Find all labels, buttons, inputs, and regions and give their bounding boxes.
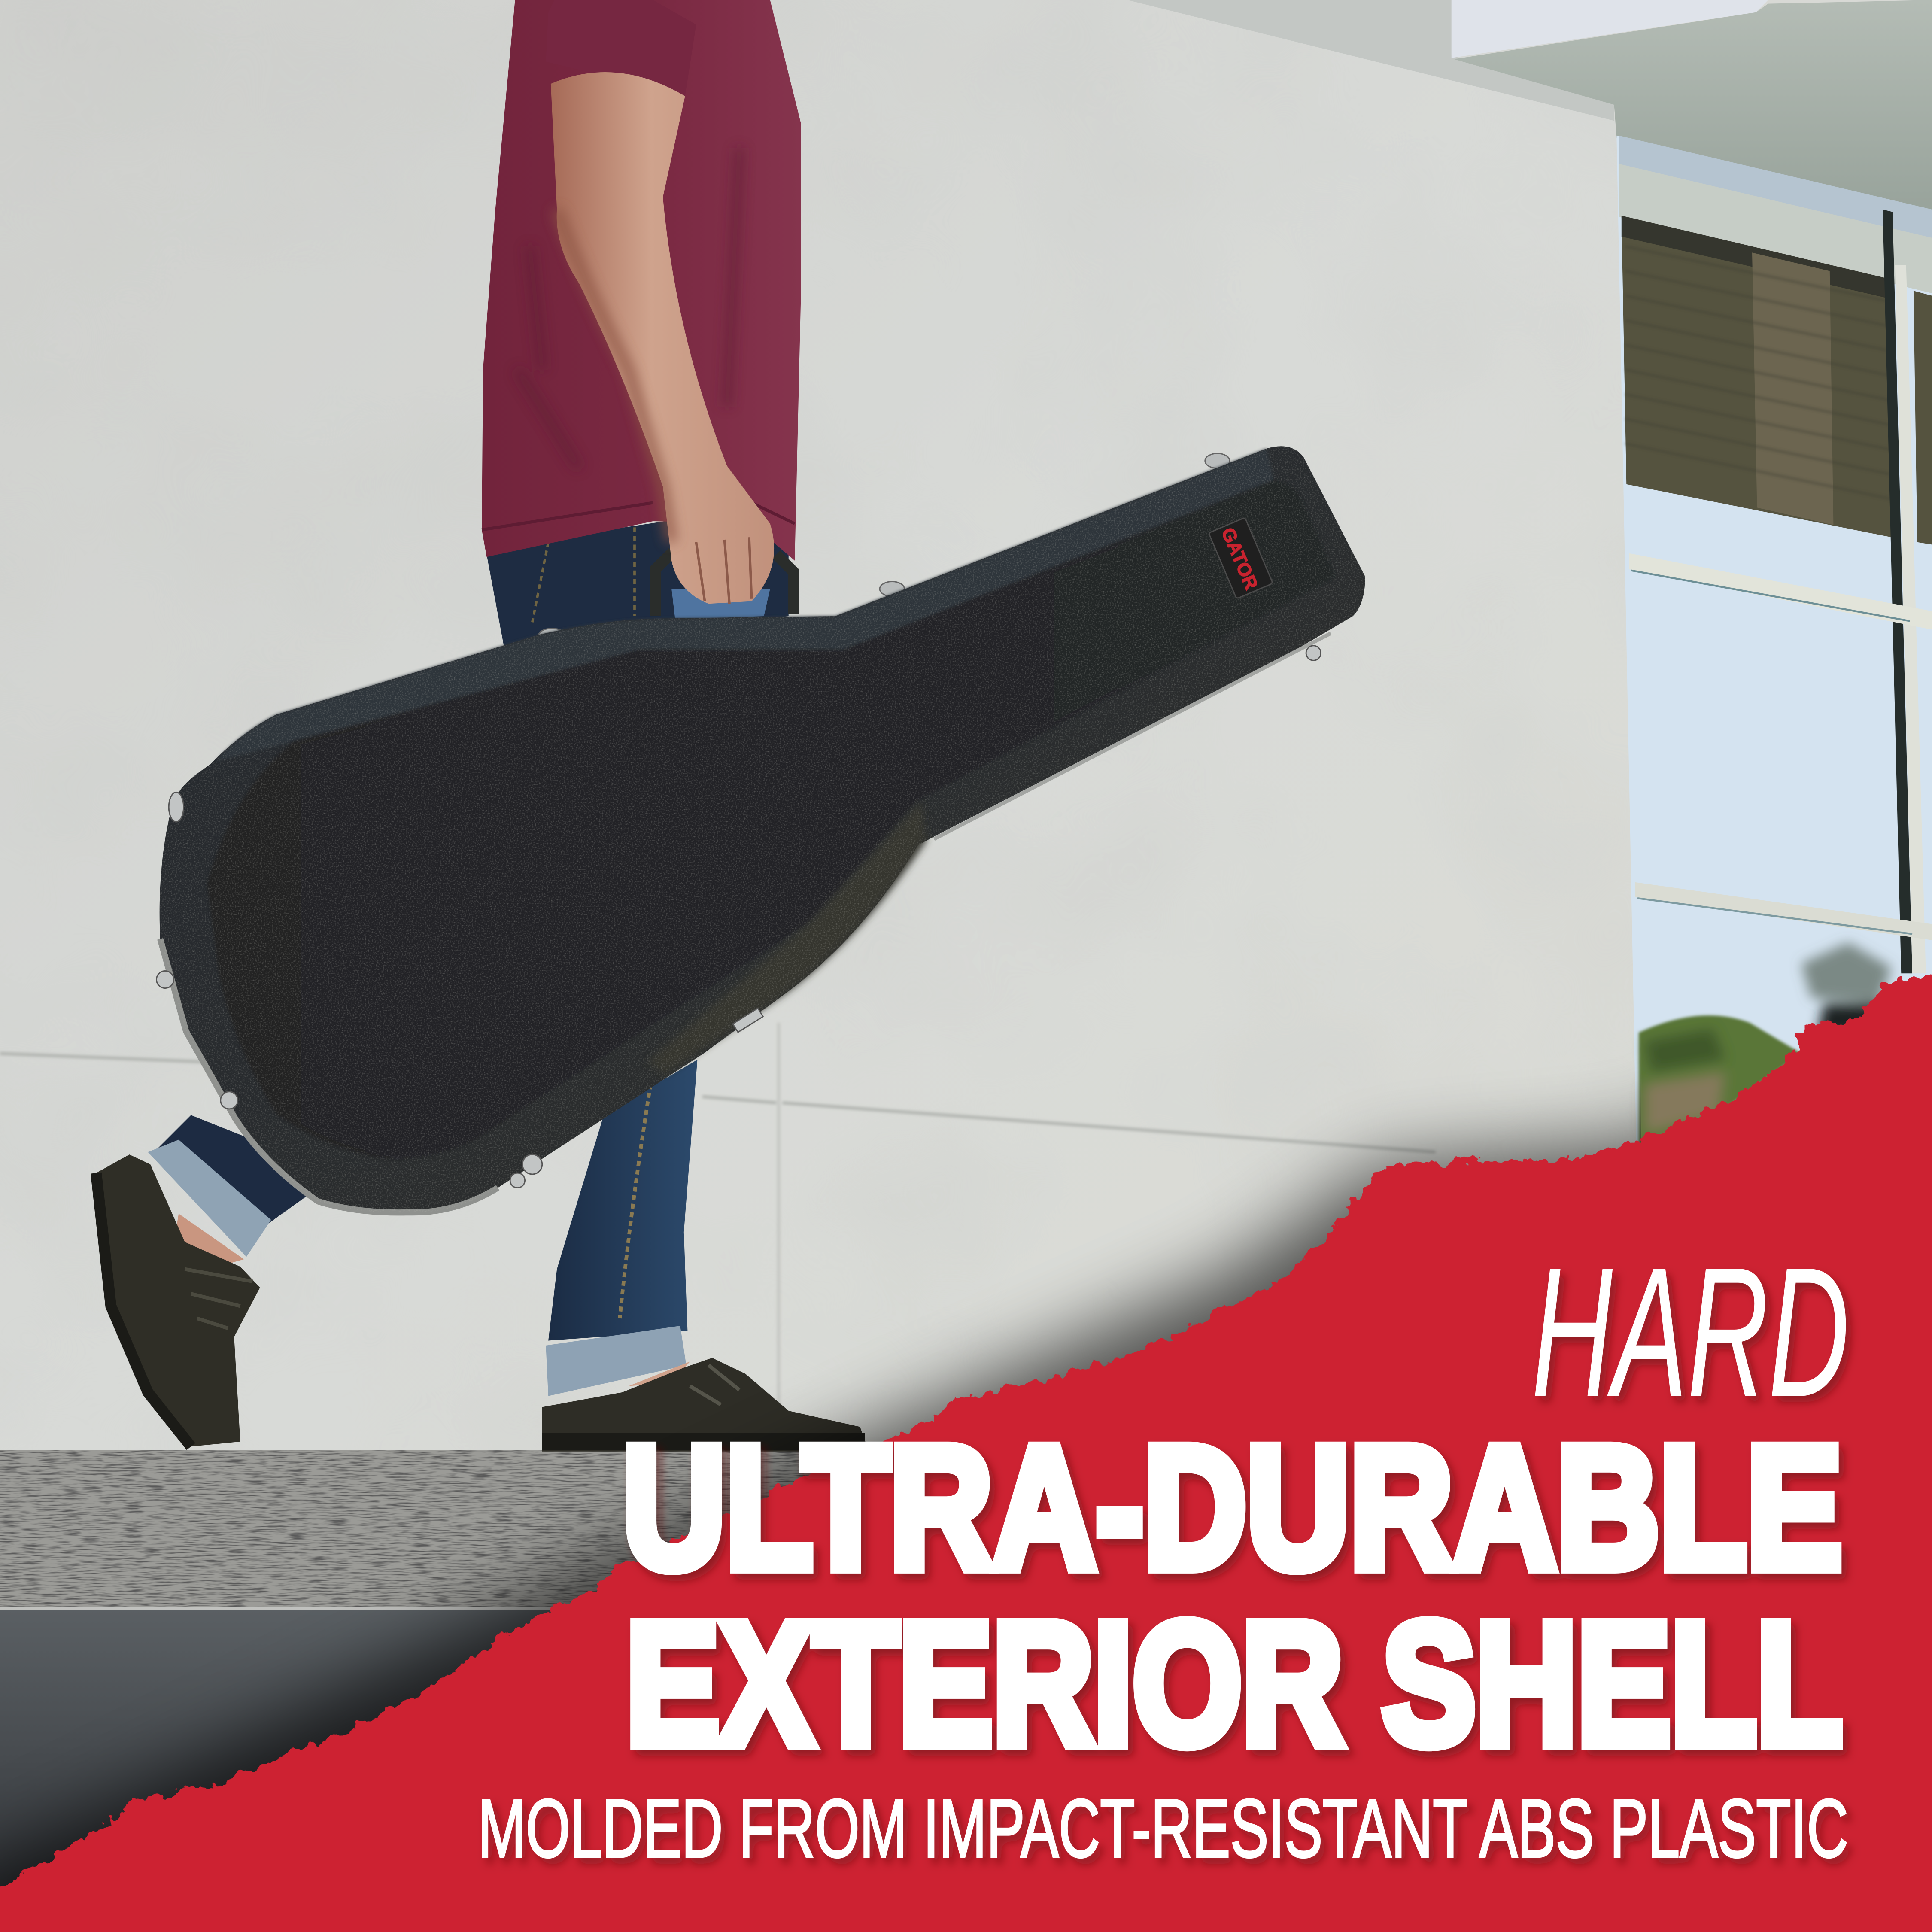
case lower rim [160, 939, 498, 1212]
jeans stitching [620, 1084, 650, 1318]
mullion one shadow line [1631, 571, 1910, 621]
headline text block [478, 1229, 1850, 1874]
shirt hem [482, 503, 795, 530]
front shoe sole [542, 1439, 865, 1445]
guitar case [123, 419, 1392, 1232]
Gator badge [1209, 518, 1273, 599]
t-shirt [482, 0, 801, 561]
sleeve [546, 0, 696, 96]
lit lower bevel [647, 801, 927, 1075]
badge wordmark: GATOR [1217, 525, 1262, 592]
horizontal mullion two [1635, 882, 1932, 940]
light vertical mullion [1895, 265, 1926, 973]
back shoe sole [96, 1173, 191, 1446]
neck rim [934, 633, 1331, 839]
horizontal mullion one [1629, 553, 1932, 630]
red torn panel [0, 967, 1932, 1932]
asphalt [0, 1610, 690, 1906]
shirt folds [517, 148, 739, 468]
window frame background [1616, 136, 1932, 1146]
blinds [1622, 216, 1891, 537]
front leg jeans [548, 1060, 697, 1340]
back ankle [173, 1214, 244, 1269]
front shoe [542, 1358, 866, 1452]
right blinds [1914, 291, 1932, 544]
jeans pocket stitch [532, 527, 635, 622]
top frame [1619, 164, 1932, 293]
concrete texture [0, 1450, 887, 1608]
dark vertical mullion [1883, 210, 1912, 973]
window wall [1616, 136, 1932, 1146]
wall seams [0, 1023, 1435, 1452]
case body [160, 446, 1365, 1212]
blind slats [1625, 246, 1891, 499]
back leg jeans [154, 1115, 308, 1226]
sky reflection strip [1619, 136, 1932, 240]
blinds lighter panel [1752, 252, 1833, 525]
waist highlight denim [671, 589, 770, 620]
white fascia [1452, 0, 1768, 58]
back leg cuff [148, 1140, 271, 1257]
torn edge shadow [0, 986, 1932, 1932]
soffit [1454, 0, 1932, 212]
back shoe [96, 1154, 260, 1446]
green shrubs [1639, 1015, 1801, 1146]
front leg cuff [546, 1326, 687, 1396]
wall mottling [0, 0, 1639, 1479]
front shoe eyelets [690, 1365, 739, 1405]
arm shading [557, 210, 671, 542]
case speckle texture [123, 419, 1392, 1232]
handle [656, 552, 793, 616]
blinds dark top [1622, 216, 1888, 298]
wall background [0, 0, 1639, 1479]
lit top bevel [216, 449, 1274, 762]
case inner face [207, 480, 1336, 1159]
curb line [0, 1607, 641, 1610]
mullion two shadow line [1637, 898, 1912, 934]
person [96, 0, 866, 1452]
concrete step [0, 1450, 887, 1610]
latches and hardware [156, 646, 1321, 1188]
arm and hand [551, 72, 774, 604]
upper jeans [486, 521, 789, 653]
front ankle [629, 1361, 690, 1386]
building overhang and roof trim [1127, 0, 1932, 212]
top hardware behind case [538, 453, 1230, 643]
back shoe laces [185, 1269, 252, 1328]
finger lines [696, 537, 752, 604]
reflected tree [1801, 942, 1891, 1035]
upper wall shadow band [1127, 0, 1614, 121]
